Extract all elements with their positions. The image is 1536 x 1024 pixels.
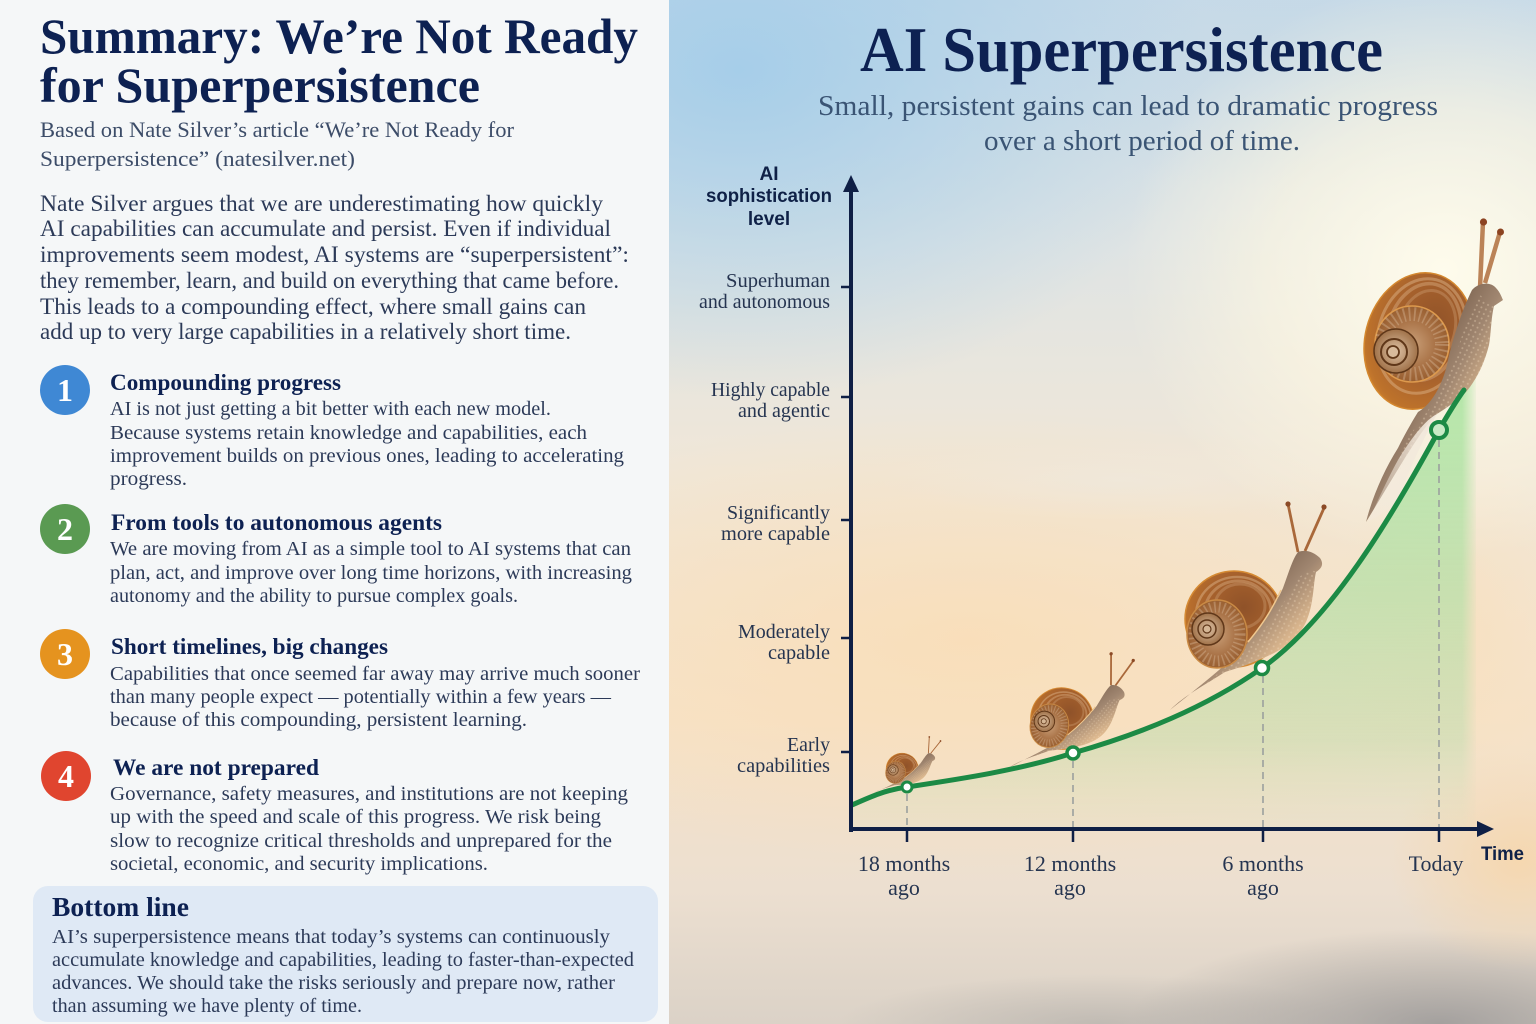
text: item 3 description: than many people expect — potentially within a few years —	[110, 686, 612, 708]
icon: number 4 badge: 4	[58, 758, 74, 794]
list item 4: we are not prepared	[41, 751, 628, 875]
y axis title: AI	[760, 164, 778, 185]
x axis time labels: 6 months	[1222, 851, 1304, 876]
text block: intro paragraph: improvements seem modest, AI systems are “superpersistent”:	[40, 242, 629, 267]
snail: 18 months ago	[874, 726, 942, 806]
x axis time labels: ago	[1247, 875, 1279, 900]
y axis level labels: and agentic	[738, 400, 830, 422]
text: item 1 description: Because systems retain knowledge and capabilities, each	[110, 422, 587, 444]
axes with arrows	[843, 175, 1494, 837]
text block: source line	[40, 117, 515, 171]
text block: intro paragraph: Nate Silver argues that we are underestimating how quickly	[40, 191, 604, 216]
icon: number 1 badge	[40, 365, 90, 415]
x axis time labels: 18 months	[858, 851, 950, 876]
list item 1: compounding progress	[40, 365, 624, 490]
title: summary heading: Summary: We’re Not Ready	[40, 8, 638, 64]
text block: intro paragraph	[40, 191, 629, 344]
snail: today	[1350, 218, 1504, 522]
text: item 1 description: AI is not just getting a bit better with each new model.	[110, 398, 551, 420]
text block: intro paragraph: This leads to a compounding effect, where small gains can	[40, 294, 587, 319]
x axis title: Time	[1481, 844, 1524, 865]
y axis level labels: capabilities	[737, 755, 830, 777]
text: bottom line description: accumulate knowledge and capabilities, leading to faster-than-expected	[52, 949, 634, 971]
callout: bottom line	[33, 886, 658, 1022]
text: bottom line description: AI’s superpersistence means that today’s systems can continuously	[52, 926, 610, 948]
heading: from tools to autonomous agents: From tools to autonomous agents	[111, 510, 442, 535]
y axis level labels: and autonomous	[699, 291, 830, 313]
text block: chart subtitle: Small, persistent gains can lead to dramatic progress	[818, 90, 1438, 122]
panel: left summary background	[0, 0, 669, 1024]
text: item 2 description: We are moving from AI as a simple tool to AI systems that can	[110, 538, 631, 560]
text block: source line: Superpersistence” (natesilver.net)	[40, 146, 355, 171]
text block: intro paragraph: AI capabilities can accumulate and persist. Even if individual	[40, 216, 611, 241]
x axis time labels: 12 months	[1024, 851, 1116, 876]
y axis title	[706, 164, 832, 230]
x axis time labels: ago	[888, 875, 920, 900]
text: item 4 description: up with the speed and scale of this progress. We risk being	[110, 806, 601, 828]
y axis level labels: Moderately	[738, 621, 830, 643]
text: item 4 description: societal, economic, and security implications.	[110, 853, 488, 875]
text: item 2 description: plan, act, and improve over long time horizons, with increasing	[110, 562, 632, 584]
text: bottom line description: than assuming we have plenty of time.	[52, 995, 362, 1017]
icon: number 3 badge: 3	[57, 636, 73, 672]
text block: chart subtitle	[818, 90, 1438, 157]
text: bottom line description: advances. We should take the risks seriously and prepare now, rather	[52, 972, 615, 994]
text: item 4 description: slow to recognize critical thresholds and unprepared for the	[110, 830, 612, 852]
icon: number 1 badge: 1	[57, 372, 73, 408]
y axis title: level	[748, 209, 790, 230]
y axis level labels: Significantly	[727, 502, 830, 524]
icon: number 2 badge	[40, 504, 90, 554]
icon: number 4 badge	[41, 751, 91, 801]
text: bottom line description	[52, 926, 634, 1017]
x axis tick marks	[907, 829, 1439, 842]
text: item 1 description: progress.	[110, 468, 187, 490]
text: item 1 description: improvement builds on previous ones, leading to accelerating	[110, 445, 624, 467]
snail: 12 months ago	[1010, 636, 1136, 788]
chart: AI sophistication over time	[699, 164, 1524, 900]
title: summary heading: for Superpersistence	[40, 57, 480, 113]
y axis level labels	[699, 270, 830, 777]
text: item 3 description: Capabilities that once seemed far away may arrive much sooner	[110, 663, 640, 685]
text: item 3 description: because of this compounding, persistent learning.	[110, 709, 527, 731]
guide lines: dashed drops	[907, 440, 1439, 827]
list item 3: short timelines, big changes	[40, 629, 640, 731]
y axis tick marks	[841, 287, 851, 752]
icon: number 2 badge: 2	[57, 511, 73, 547]
marker: 18 months ago	[902, 782, 912, 792]
y axis title: sophistication	[706, 186, 832, 207]
y axis level labels: more capable	[721, 523, 830, 545]
heading: bottom line: Bottom line	[52, 892, 189, 922]
chart area: green fill under curve	[852, 375, 1476, 828]
panel: right sky background	[669, 0, 1536, 1024]
growth curve	[852, 390, 1464, 805]
x axis time labels: Today	[1409, 851, 1463, 876]
text block: chart subtitle: over a short period of time.	[984, 125, 1300, 157]
text: item 1 description	[110, 398, 624, 490]
icon: number 3 badge	[40, 629, 90, 679]
y axis level labels: capable	[768, 642, 830, 664]
marker: 6 months ago	[1256, 662, 1268, 674]
snail: 6 months ago	[1170, 501, 1327, 710]
y axis level labels: Superhuman	[726, 270, 830, 292]
x axis time labels	[858, 851, 1463, 900]
text block: source line: Based on Nate Silver’s article “We’re Not Ready for	[40, 117, 515, 142]
title: AI Superpersistence: AI Superpersistence	[860, 15, 1383, 85]
heading: we are not prepared: We are not prepared	[113, 755, 319, 780]
text: item 3 description	[110, 663, 640, 731]
title: summary heading	[40, 8, 638, 113]
y axis level labels: Highly capable	[711, 379, 830, 401]
y axis level labels: Early	[787, 734, 830, 756]
text: item 2 description: autonomy and the ability to pursue complex goals.	[110, 585, 518, 607]
text: item 4 description: Governance, safety measures, and institutions are not keeping	[110, 783, 628, 805]
text block: intro paragraph: add up to very large capabilities in a relatively short time.	[40, 319, 571, 344]
heading: short timelines, big changes: Short timelines, big changes	[111, 634, 388, 659]
list item 2: from tools to autonomous agents	[40, 504, 632, 607]
x axis time labels: ago	[1054, 875, 1086, 900]
text block: intro paragraph: they remember, learn, and build on everything that came before.	[40, 268, 619, 293]
heading: compounding progress: Compounding progress	[110, 370, 341, 395]
text: item 4 description	[110, 783, 628, 875]
text: item 2 description	[110, 538, 632, 607]
marker: today	[1431, 422, 1447, 438]
marker: 12 months ago	[1067, 747, 1079, 759]
